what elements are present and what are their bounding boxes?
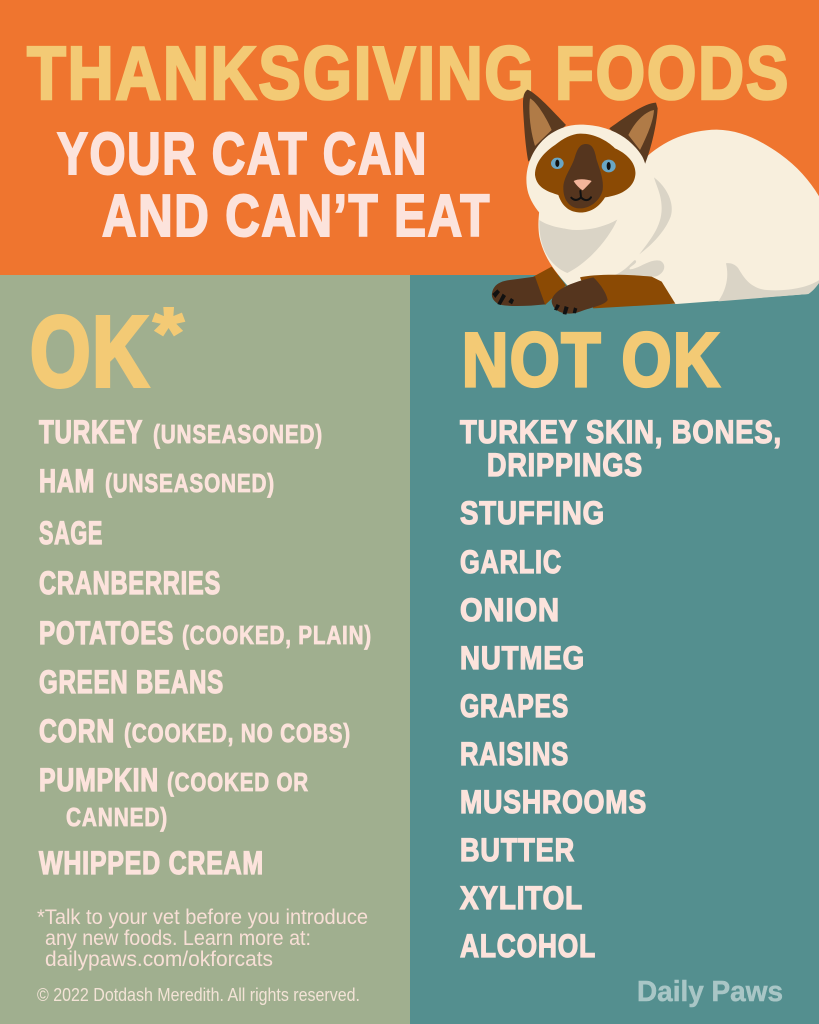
list: OK foods — [39, 414, 372, 881]
item: ham — [39, 463, 275, 499]
item: turkey skin: DRIPPINGS — [487, 447, 643, 483]
item: ham: (UNSEASONED) — [105, 468, 275, 498]
heading: OK: * — [153, 294, 184, 374]
front paw near — [580, 275, 675, 308]
item: corn — [39, 713, 351, 749]
item: whipped cream: WHIPPED CREAM — [39, 845, 264, 881]
subtitle — [57, 121, 491, 249]
icon: siamese cat — [492, 90, 819, 315]
item: potatoes: POTATOES — [39, 615, 174, 651]
item: potatoes: (COOKED, PLAIN) — [182, 620, 372, 650]
nose and mouth — [574, 179, 592, 190]
heading: NOT OK: NOT OK — [462, 318, 721, 403]
item: xylitol: XYLITOL — [460, 880, 583, 916]
item: corn: CORN — [39, 713, 115, 749]
heading: OK: OK — [30, 296, 150, 408]
item: green beans: GREEN BEANS — [39, 664, 224, 700]
item: turkey — [39, 414, 323, 450]
item: potatoes — [39, 615, 372, 651]
copyright: © 2022 Dotdash Meredith. All rights reserved. — [37, 985, 360, 1005]
panel: not OK foods background — [410, 275, 819, 1024]
item: pumpkin: CANNED) — [66, 802, 168, 832]
item: cranberries: CRANBERRIES — [39, 565, 221, 601]
item: mushrooms: MUSHROOMS — [460, 784, 647, 820]
item: turkey: (UNSEASONED) — [153, 419, 323, 449]
item: onion: ONION — [460, 592, 560, 628]
footnote: dailypaws.com/okforcats — [45, 948, 273, 971]
item: butter: BUTTER — [460, 832, 575, 868]
footnote: *Talk to your vet before you introduce — [37, 906, 368, 929]
front paw rear — [533, 267, 566, 305]
item: raisins: RAISINS — [460, 736, 569, 772]
item: grapes: GRAPES — [460, 688, 569, 724]
subtitle: AND CAN’T EAT — [102, 183, 491, 249]
item: pumpkin: (COOKED OR — [167, 767, 309, 797]
logo: Daily Paws: Daily Paws — [637, 976, 783, 1008]
item: ham: HAM — [39, 463, 95, 499]
item: pumpkin — [39, 762, 309, 832]
panel: orange header — [0, 0, 819, 275]
item: alcohol: ALCOHOL — [460, 928, 596, 964]
ears — [523, 90, 566, 162]
list: not OK foods — [460, 414, 782, 964]
eyes — [551, 158, 564, 169]
footnote: any new foods. Learn more at: — [45, 927, 311, 950]
item: nutmeg: NUTMEG — [460, 640, 585, 676]
item: turkey skin — [460, 414, 782, 483]
item: turkey: TURKEY — [39, 414, 143, 450]
item: sage: SAGE — [39, 515, 103, 551]
item: corn: (COOKED, NO COBS) — [124, 718, 351, 748]
head — [526, 125, 647, 230]
panel: OK foods background — [0, 275, 410, 1024]
footnote — [37, 906, 368, 971]
item: stuffing: STUFFING — [460, 495, 605, 531]
subtitle: YOUR CAT CAN — [57, 121, 428, 187]
item: pumpkin: PUMPKIN — [39, 762, 159, 798]
item: garlic: GARLIC — [460, 544, 562, 580]
